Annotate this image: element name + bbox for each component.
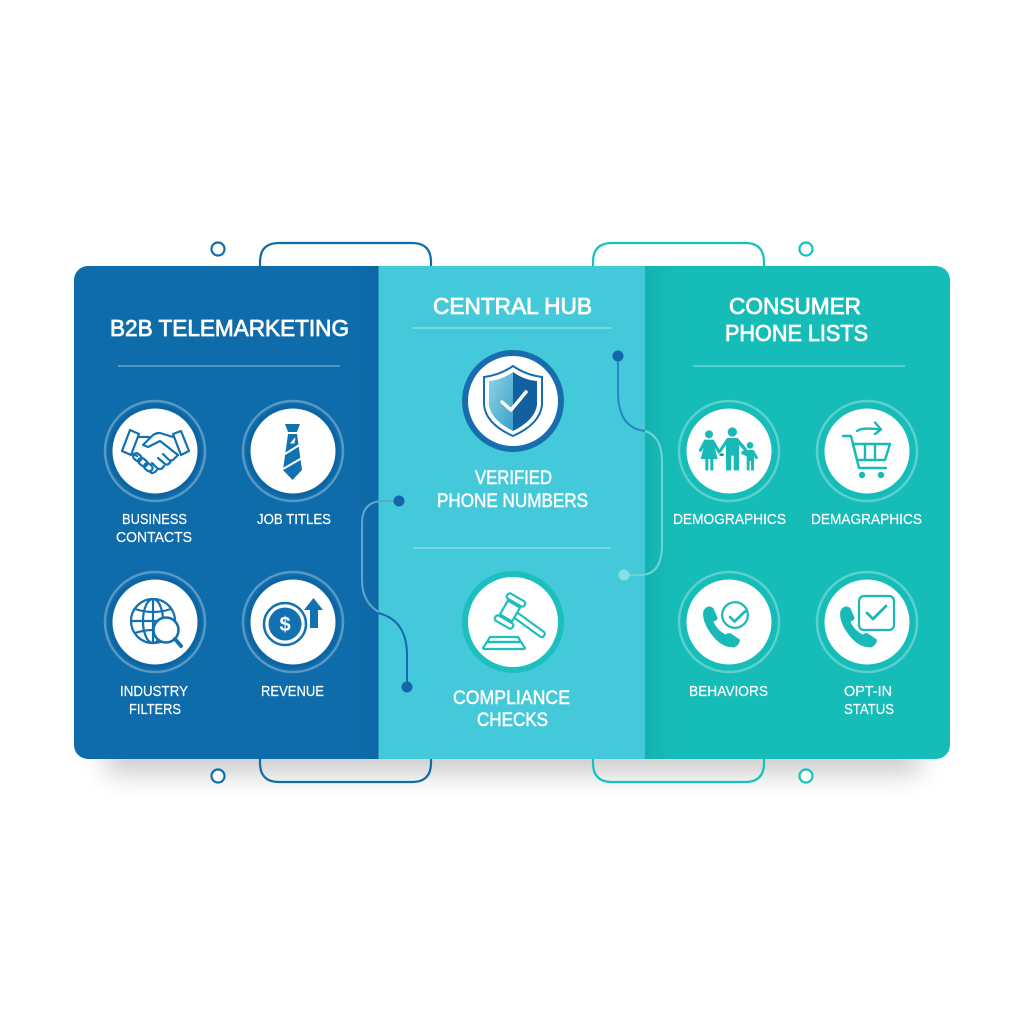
label: business contacts: BUSINESS (122, 512, 187, 528)
icon: handshake (105, 401, 205, 501)
infographic (74, 241, 950, 786)
icon: globe and magnifier (105, 572, 205, 672)
icon: shield with check (465, 353, 561, 449)
label: revenue: REVENUE (261, 684, 324, 700)
label: compliance checks (453, 688, 570, 731)
label: job titles: JOB TITLES (257, 512, 331, 528)
label: opt-in status (844, 684, 894, 718)
label: demographics: DEMOGRAPHICS (673, 512, 786, 528)
icon: phone with checkbox (817, 572, 917, 672)
icon: revenue coin and arrow (243, 572, 343, 672)
label: verified phone numbers: VERIFIED (475, 468, 552, 489)
connector: right (612, 350, 662, 580)
panel: B2B telemarketing background (74, 266, 379, 759)
label: opt-in status: OPT-IN (844, 684, 892, 700)
label: verified phone numbers (437, 468, 588, 512)
decorative ring bottom right (800, 770, 812, 782)
top left bracket (260, 243, 431, 267)
bottom right bracket (593, 758, 764, 782)
icon: shopping cart with arrow (817, 401, 917, 501)
heading: consumer phone lists: PHONE LISTS (725, 320, 868, 346)
connector: left (362, 496, 412, 692)
right panel edge shading (645, 266, 652, 759)
decorative ring bottom left (212, 770, 224, 782)
label: opt-in status: STATUS (844, 702, 894, 718)
icon: gavel (465, 574, 561, 670)
icon: family (679, 401, 779, 501)
label: business contacts: CONTACTS (116, 530, 192, 546)
label: compliance checks: COMPLIANCE (453, 688, 570, 709)
label: industry filters: INDUSTRY (120, 684, 188, 700)
label: behaviors: BEHAVIORS (689, 684, 768, 700)
panels (74, 266, 950, 759)
heading: consumer phone lists (725, 293, 868, 346)
icon: revenue coin and arrow: $ (279, 614, 291, 636)
decorative ring top right (800, 242, 812, 256)
bottom left bracket (260, 758, 431, 782)
icon: necktie (243, 401, 343, 501)
top right bracket (593, 243, 764, 267)
label: demagraphics: DEMAGRAPHICS (811, 512, 922, 528)
icon: phone with check circle (679, 572, 779, 672)
panel: central hub background (378, 266, 646, 759)
label: industry filters (120, 684, 188, 718)
label: business contacts (116, 512, 192, 546)
heading: B2B telemarketing: B2B TELEMARKETING (110, 315, 349, 341)
label: compliance checks: CHECKS (477, 710, 548, 731)
panel shadow (105, 738, 920, 774)
left panel edge shading (350, 266, 378, 759)
decorative ring top left (212, 242, 224, 256)
heading: consumer phone lists: CONSUMER (729, 293, 861, 319)
label: verified phone numbers: PHONE NUMBERS (437, 491, 588, 512)
label: industry filters: FILTERS (129, 702, 181, 718)
panel: consumer phone lists background (645, 266, 950, 759)
heading: central hub: CENTRAL HUB (433, 293, 592, 319)
